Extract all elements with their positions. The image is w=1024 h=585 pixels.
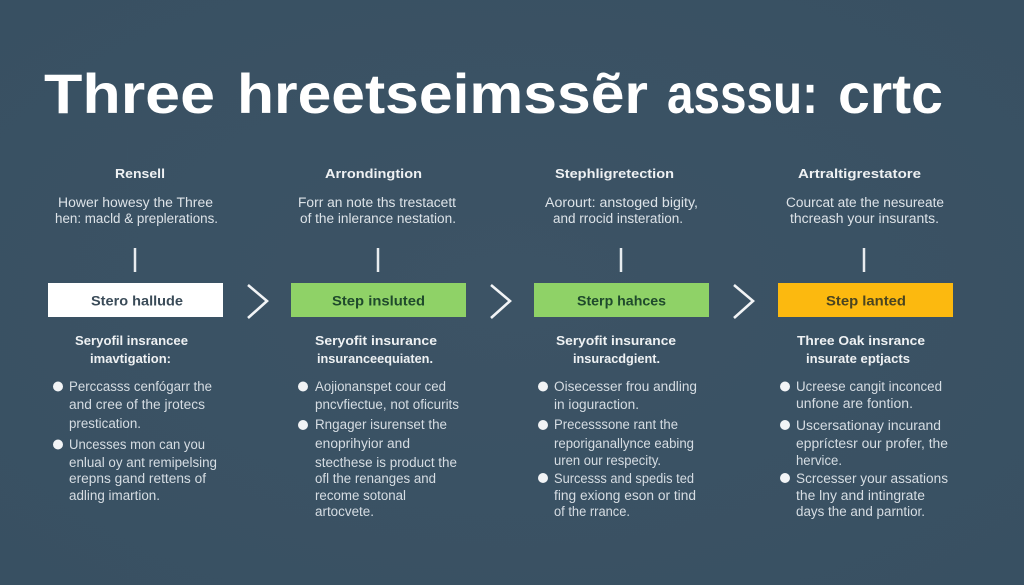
step 1 box (48, 283, 223, 317)
column 4 bullets: Scrcesser your assations (796, 471, 948, 486)
column 3 description: and rrocid insteration. (553, 211, 683, 226)
column 1 bullets: Uncesses mon can you (69, 437, 205, 452)
column 4 bullets: hervice. (796, 453, 842, 468)
column 4 bullets: unfone are fontion. (796, 396, 913, 411)
column 3 bullets (538, 379, 697, 519)
column 3 subheading: Seryofit insurance (556, 333, 676, 348)
column 4 description: thcreash your insurants. (790, 211, 939, 226)
column 3 bullets: in ioguraction. (554, 397, 639, 412)
panel: column 2 (291, 166, 466, 519)
column 2 heading: Arrondingtion (325, 166, 422, 181)
column 1 bullets: and cree of the jrotecs (69, 397, 205, 412)
column 1 bullets: prestication. (69, 416, 141, 431)
column 1 description (55, 195, 218, 226)
column 1 description: Hower howesy the Three (58, 195, 213, 210)
step 3 box (534, 283, 709, 317)
column 4 bullets: Uscersationay incurand (796, 418, 941, 433)
column 4 bullets: the lny and intingrate (796, 488, 925, 503)
column 2 bullets: artocvete. (315, 504, 374, 519)
column 3 bullets: uren our respecity. (554, 453, 661, 468)
column 2 bullets (298, 379, 459, 519)
column 2 bullets: ofl the renanges and (315, 471, 436, 486)
column 2 subheading (315, 333, 437, 366)
column 1 connector (134, 248, 136, 272)
column 2 connector (377, 248, 379, 272)
column 2 subheading: insuranceequiaten. (317, 351, 433, 366)
panel: column 1 (48, 166, 223, 503)
column 3 description (545, 195, 698, 226)
step 2 box (291, 283, 466, 317)
panel: column 3 (534, 166, 709, 519)
column 1 subheading: imavtigation: (90, 351, 171, 366)
title: crtc (838, 62, 943, 125)
column 4 subheading: insurate eptjacts (806, 351, 910, 366)
step 3 box: Sterp hahces (577, 294, 666, 308)
step 4 box: Step lanted (826, 294, 906, 308)
column 3 description: Aorourt: anstoged bigity, (545, 195, 698, 210)
column 4 connector (863, 248, 865, 272)
step 2 box: Step insluted (332, 294, 425, 308)
column 3 bullets: Oisecesser frou andling (554, 379, 697, 394)
title: Three (44, 62, 215, 125)
column 2 bullets: stecthese is product the (315, 455, 457, 470)
column 4 description: Courcat ate the nesureate (786, 195, 944, 210)
title: hreetseimssẽr (237, 62, 648, 125)
arrow 1 (248, 285, 267, 318)
column 3 connector (620, 248, 622, 272)
column 1 bullets: Perccasss cenfógarr the (69, 379, 212, 394)
column 1 bullets: adling imartion. (69, 488, 160, 503)
column 3 bullets: Precesssone rant the (554, 417, 678, 432)
title (44, 62, 943, 125)
column 2 subheading: Seryofit insurance (315, 333, 437, 348)
column 1 bullets: enlual oy ant remipelsing (69, 455, 217, 470)
column 2 bullets: enoprihyior and (315, 436, 410, 451)
column 2 bullets: recome sotonal (315, 488, 406, 503)
step 4 box (778, 283, 953, 317)
column 4 subheading (797, 333, 925, 366)
column 1 bullets: erepns gand rettens of (69, 471, 206, 486)
arrow 3 (734, 285, 753, 318)
column 1 description: hen: macld & preplerations. (55, 211, 218, 226)
column 1 subheading: Seryofil insrancee (75, 333, 188, 348)
column 2 bullets: Aojionanspet cour ced (315, 379, 446, 394)
column 2 bullets: pncvfiectue, not oficurits (315, 397, 459, 412)
title: asssu: (667, 62, 818, 125)
column 3 bullets: of the rrance. (554, 504, 630, 519)
column 4 heading: Artraltigrestatore (798, 166, 921, 181)
arrow 2 (491, 285, 510, 318)
column 4 subheading: Three Oak insrance (797, 333, 925, 348)
column 3 heading: Stephligretection (555, 166, 674, 181)
column 3 bullets: fing exiong eson or tind (554, 488, 696, 503)
step 1 box: Stero hallude (91, 294, 184, 308)
column 4 bullets: Ucreese cangit inconced (796, 379, 942, 394)
column 3 bullets: reporiganallynce eabing (554, 436, 694, 451)
column 3 subheading (556, 333, 676, 366)
column 4 bullets: eppríctesr our profer, the (796, 436, 948, 451)
column 1 subheading (75, 333, 188, 366)
panel: column 4 (778, 166, 953, 519)
column 4 bullets: days the and parntior. (796, 504, 925, 519)
column 1 bullets (53, 379, 217, 503)
column 1 heading: Rensell (115, 166, 165, 181)
column 3 subheading: insuracdgient. (573, 351, 660, 366)
column 2 description: Forr an note ths trestacett (298, 195, 456, 210)
column 4 description (786, 195, 944, 226)
column 2 description (298, 195, 456, 226)
column 2 description: of the inlerance nestation. (300, 211, 456, 226)
column 2 bullets: Rngager isurenset the (315, 417, 447, 432)
column 3 bullets: Surcesss and spedis ted (554, 471, 694, 486)
column 4 bullets (780, 379, 948, 519)
